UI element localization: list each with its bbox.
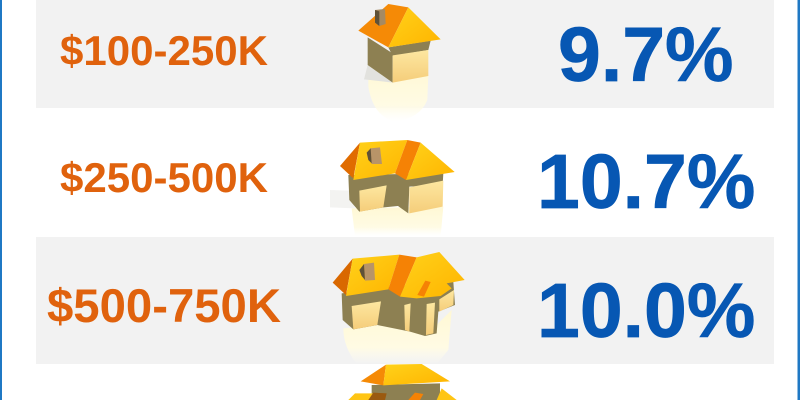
price label 1: $100-250K: [60, 27, 268, 74]
percentage 2: 10.7%: [537, 139, 755, 225]
price label 3: $500-750K: [47, 279, 281, 332]
icon: largest house, cropped: [348, 364, 457, 400]
icon: small house: [358, 4, 441, 122]
row band 1: [36, 0, 774, 108]
row band 3: [36, 237, 774, 364]
icon: large house: [333, 252, 465, 364]
percentage 3: 10.0%: [537, 268, 755, 354]
icon: medium house: [330, 140, 455, 236]
percentage 1: 9.7%: [558, 12, 734, 98]
price label 2: $250-500K: [60, 154, 268, 201]
